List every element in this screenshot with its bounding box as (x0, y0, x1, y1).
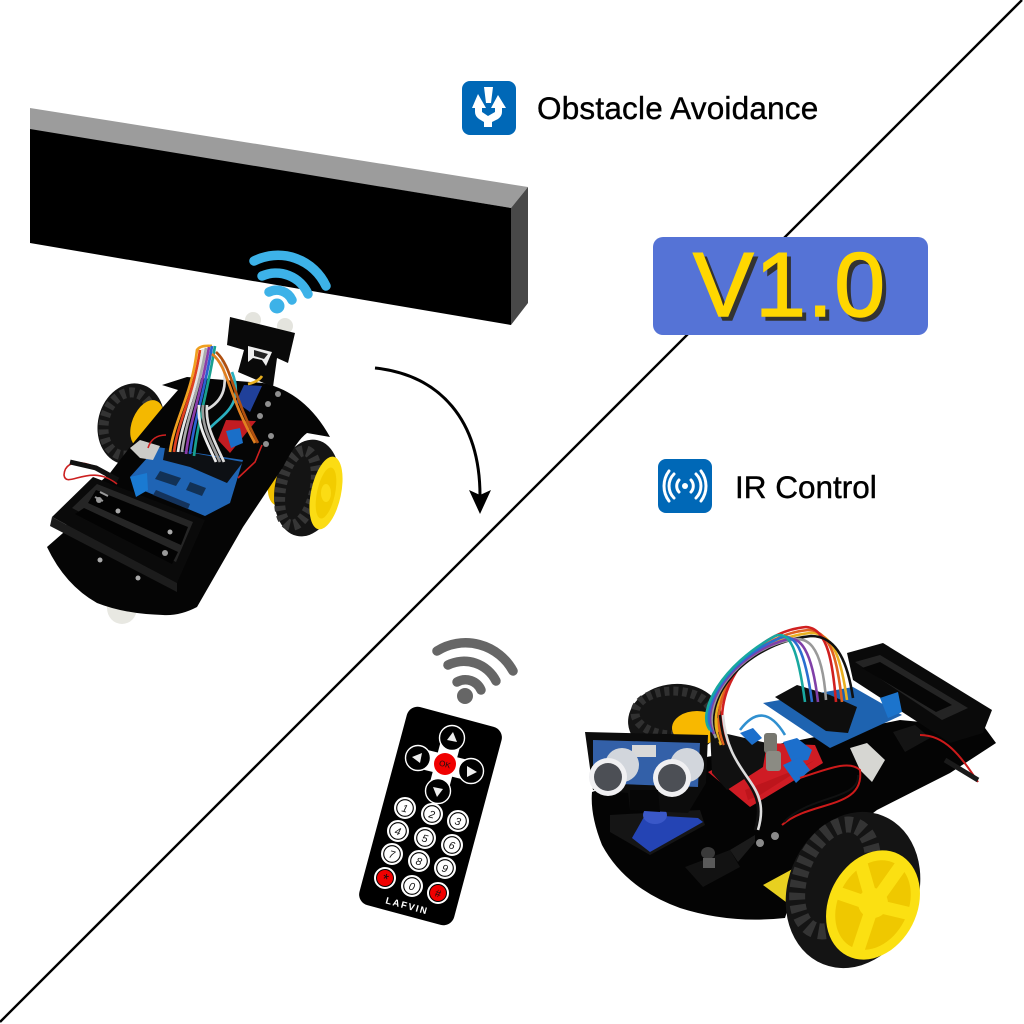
IR remote control (357, 704, 504, 928)
version badge V1.0: V1.0 (697, 239, 889, 340)
chassis plate (592, 720, 996, 920)
red motor driver board (708, 743, 823, 807)
number buttons: * (380, 870, 391, 889)
version badge V1.0 (653, 235, 928, 340)
blue sensor shield board (130, 447, 243, 516)
heatsink (710, 730, 767, 790)
icon: blue wifi signal (254, 255, 326, 314)
sensor mount plate (227, 312, 295, 387)
front wheel (763, 791, 943, 989)
icon: obstacle avoidance (462, 81, 516, 135)
rear wheel (625, 680, 725, 760)
number buttons: 2 (426, 808, 436, 822)
number buttons: 6 (447, 839, 456, 853)
number buttons: 9 (440, 862, 449, 876)
ultrasonic sensor on mount (585, 732, 708, 813)
power wires (782, 765, 860, 825)
remote body (357, 704, 504, 928)
directional pad: OK (438, 759, 452, 770)
sensor shield board (763, 685, 902, 748)
chassis screws (257, 391, 281, 447)
heading: IR Control: IR Control (735, 469, 877, 505)
number buttons: 5 (420, 832, 429, 846)
USB port (130, 440, 160, 460)
caster ball (107, 592, 137, 624)
power connector (893, 725, 978, 782)
directional pad (406, 726, 484, 804)
number buttons: 1 (400, 802, 409, 816)
servo (236, 385, 262, 412)
battery box (847, 643, 992, 743)
IR receiver module (685, 832, 779, 887)
left rear wheel (89, 376, 173, 472)
right front wheel (262, 433, 348, 543)
number buttons: 0 (407, 880, 416, 894)
power lead (64, 462, 118, 484)
red motor driver (218, 420, 256, 453)
capacitors and terminals (740, 728, 812, 783)
number buttons: 4 (393, 825, 402, 839)
heading: Obstacle Avoidance: Obstacle Avoidance (537, 90, 818, 126)
remote brand label: LAFVIN (384, 895, 429, 917)
number buttons: 7 (387, 848, 397, 862)
chassis plate (47, 377, 330, 615)
number buttons: # (433, 887, 442, 901)
jumper wire bundles (148, 346, 262, 478)
icon: IR control (658, 459, 712, 513)
number buttons: 3 (453, 815, 462, 829)
version badge V1.0: V1.0 (693, 235, 885, 336)
servo (610, 806, 705, 855)
number buttons: 8 (414, 855, 423, 869)
battery box (50, 477, 205, 592)
curved arrow (375, 368, 491, 514)
jumper wire harness (706, 627, 853, 830)
USB port (850, 743, 885, 782)
obstacle wall block (30, 108, 528, 325)
robot car: obstacle avoidance view (47, 312, 348, 624)
number buttons (374, 798, 468, 904)
icon: grey wifi signal (437, 643, 513, 704)
robot car: IR control view (585, 627, 996, 989)
